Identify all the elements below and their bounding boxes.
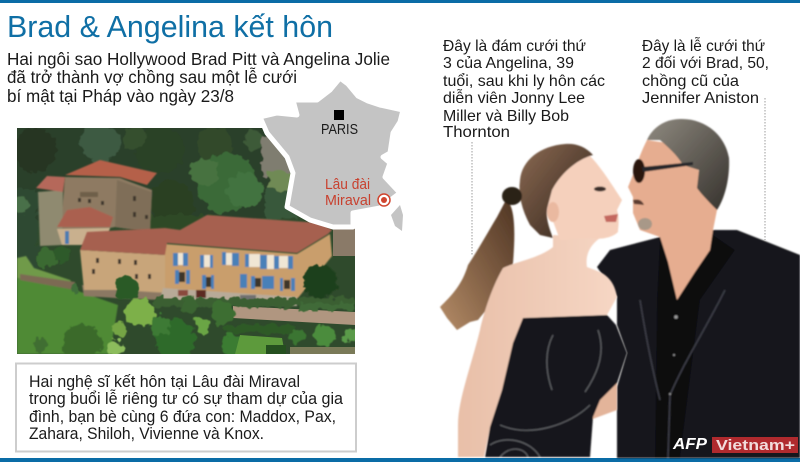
top bar [0, 0, 800, 3]
bottom bar [0, 458, 800, 462]
intro text: bí mật tại Pháp vào ngày 23/8 [7, 86, 234, 106]
foliage foreground [32, 247, 357, 362]
hair [519, 144, 593, 238]
lapel line [640, 290, 725, 458]
shirt [655, 235, 735, 458]
caption box: Zahara, Shiloh, Vivienne và Knox. [29, 425, 264, 443]
photo: Brad Pitt [597, 119, 800, 458]
dress highlights [490, 330, 601, 457]
building: main house [80, 215, 332, 306]
Angelina note: Miller và Billy Bob [443, 108, 569, 125]
retaining wall [233, 306, 355, 325]
face [545, 153, 622, 240]
label: Miraval: Miraval [325, 192, 371, 209]
caption box: trong buổi lễ riêng tư có sự tham dự của gia [29, 389, 344, 408]
building: back house [36, 160, 157, 246]
intro text: Hai ngôi sao Hollywood Brad Pitt và Angelina Jolie [7, 49, 390, 69]
grey hair [647, 119, 729, 210]
goatee [638, 218, 652, 230]
label: Miraval [325, 176, 371, 209]
Brad note: Đây là lễ cưới thứ [642, 36, 765, 55]
title: Brad & Angelina kết hôn [7, 9, 333, 44]
map of France [260, 78, 403, 231]
moustache [633, 199, 644, 205]
dotted leader: Angelina [471, 142, 473, 256]
shirt buttons [669, 315, 678, 395]
icon: Miraval marker [378, 194, 390, 206]
Vietnam+ logo: Vietnam+ [716, 437, 795, 454]
face and neck [628, 140, 717, 300]
arm behind [590, 383, 617, 420]
Brad note: Jennifer Aniston [642, 90, 759, 107]
label: Paris: PARIS [321, 121, 358, 138]
sunglasses [633, 159, 693, 183]
Brad note: chồng cũ của [642, 73, 739, 90]
AFP logo: AFP [672, 436, 707, 453]
photo: Angelina Jolie [440, 144, 627, 457]
ponytail [440, 200, 514, 330]
Brad note [642, 36, 769, 107]
intro text: đã trở thành vợ chồng sau một lễ cưới [7, 66, 297, 87]
caption box [16, 364, 356, 452]
icon: Paris marker [334, 110, 344, 120]
lips [604, 214, 618, 222]
black suit jacket [597, 230, 800, 458]
Angelina note: Đây là đám cưới thứ [443, 38, 586, 55]
small lawn [235, 335, 285, 354]
foliage background [17, 128, 298, 220]
Angelina note: Thornton [443, 124, 510, 141]
ear [547, 202, 559, 222]
intro text [7, 49, 390, 106]
black dress [485, 315, 627, 457]
icon: Corsica [391, 205, 403, 231]
caption box: đình, bạn bè cùng 6 đứa con: Maddox, Pax, [29, 408, 336, 426]
Angelina note: diễn viên Jonny Lee [443, 88, 585, 107]
photo: Miraval castle [10, 120, 357, 362]
Angelina note [443, 38, 605, 141]
hair bun [502, 187, 522, 205]
caption box: Hai nghệ sĩ kết hôn tại Lâu đài Miraval [29, 373, 300, 391]
lawn [17, 256, 165, 354]
label: Miraval: Lâu đài [325, 176, 370, 193]
skin: shoulders, arm and neck [458, 235, 617, 457]
dotted leader: Brad [764, 98, 766, 240]
eye [594, 186, 606, 192]
Angelina note: 3 của Angelina, 39 [443, 55, 574, 72]
Brad note: 2 đối với Brad, 50, [642, 55, 769, 72]
Angelina note: tuổi, sau khi ly hôn các [443, 72, 605, 90]
